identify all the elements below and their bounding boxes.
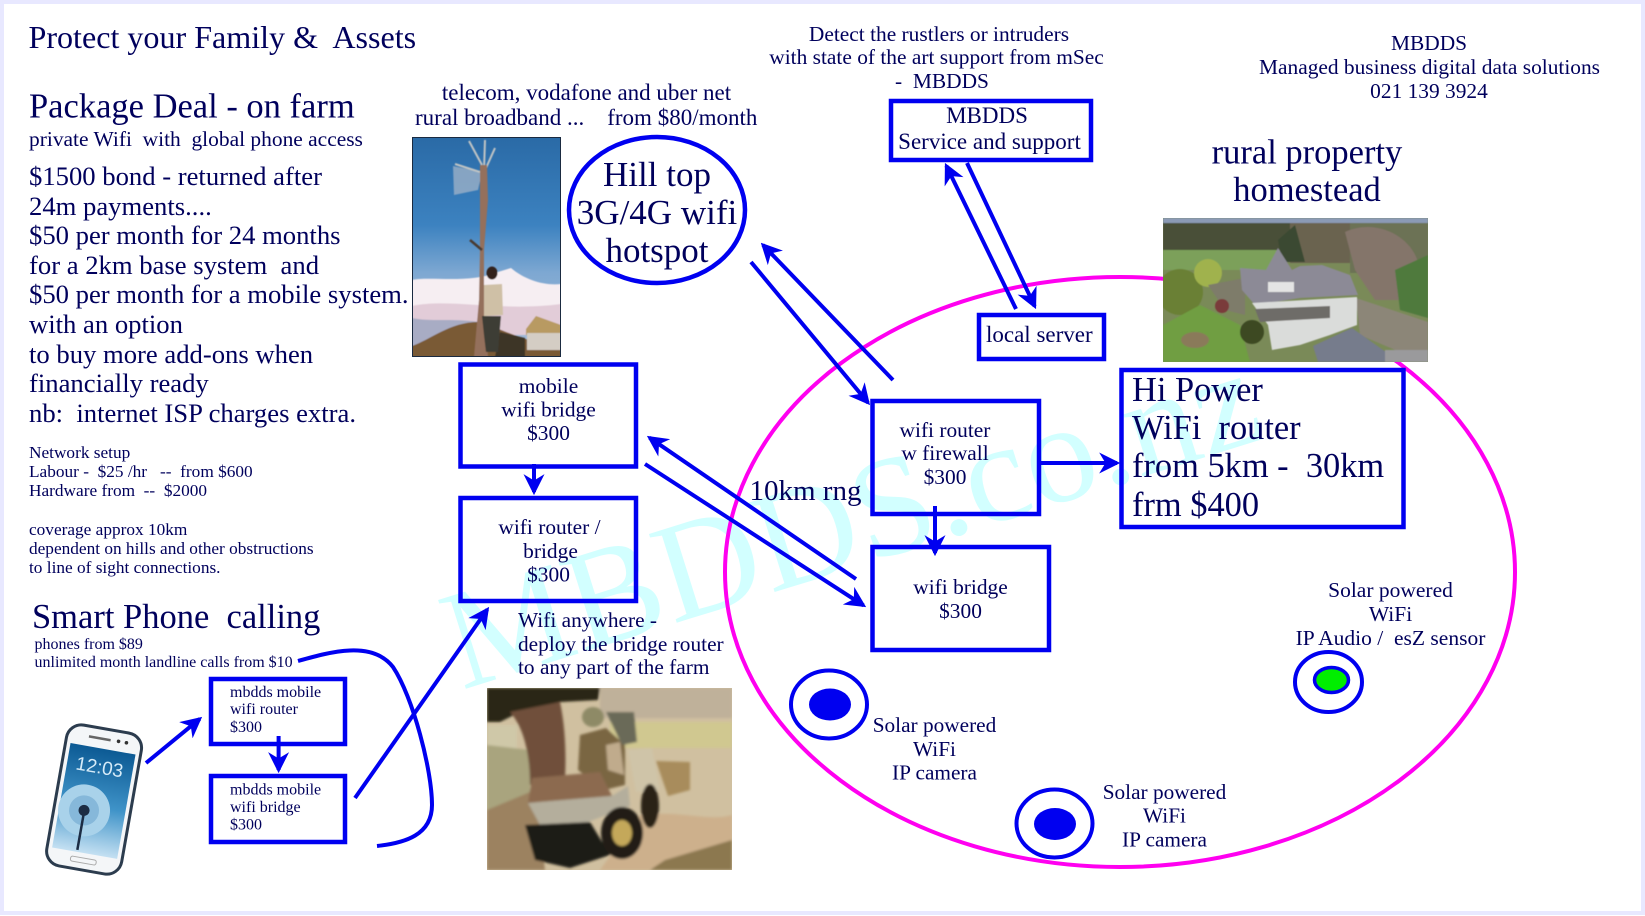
box: mobile wifi bridge: $300 [527,421,570,445]
text block: coverage: coverage approx 10km [29,520,188,539]
hotspot ellipse: hill top 3G/4G wifi: 3G/4G wifi [577,193,737,232]
box: MBDDS service and support: Service and support [898,129,1081,154]
text block: wifi anywhere: to any part of the farm [518,655,710,679]
text block: camera node 2 [1103,780,1227,852]
box: Hi Power WiFi router: from 5km - 30km [1132,447,1384,485]
box: mbdds mobile wifi bridge: mbdds mobile [230,782,321,798]
box: wifi router with firewall: w firewall [901,441,989,465]
box: mbdds mobile wifi bridge [211,776,345,842]
icon: smartphone: 12:03 [74,753,125,782]
box: Hi Power WiFi router: Hi Power [1132,371,1263,409]
text block: network setup: Labour - $25 /hr -- from $600 [29,462,253,481]
heading: smart phone calling: Smart Phone calling [32,598,320,636]
text block: package pricing: with an option [29,309,183,339]
subheading: private wifi: private Wifi with global phone access [29,127,363,151]
text block: network setup: Network setup [29,443,130,462]
arrow: mobile bridge to router bridge [532,464,536,492]
arrow: MBDDS support to local server [967,163,1035,306]
photo: hilltop antenna tower [412,137,561,357]
text block: camera node 1: IP camera [892,760,978,784]
box: local server: local server [986,322,1093,347]
hotspot ellipse: hill top 3G/4G wifi [569,137,745,283]
arrow: wifi bridge to mobile bridge [650,438,856,579]
text block: audio sensor node: Solar powered [1328,578,1453,602]
coverage ellipse: farm boundary [725,277,1515,867]
text block: phone pricing: unlimited month landline calls from $10 [34,654,293,671]
hotspot ellipse: hill top 3G/4G wifi: hotspot [605,231,709,270]
box: Hi Power WiFi router [1122,370,1404,527]
text block: package pricing: $50 per month for 24 months [29,220,341,250]
box: mobile wifi bridge: mobile [519,374,578,398]
text block: audio sensor node: WiFi [1369,602,1412,626]
title: Protect your Family & Assets [28,19,416,55]
text block: package pricing: to buy more add-ons when [29,339,313,369]
text block: package pricing: nb: internet ISP charges extra. [29,398,356,428]
box: wifi bridge [872,547,1049,650]
icon: smartphone [44,722,144,877]
photo: soldier on quad bike [487,688,732,870]
text block: coverage: to line of sight connections. [29,558,221,577]
text block: network setup [29,443,253,500]
arrow: hotspot back from router [763,245,893,380]
arrow: router to Hi Power [1041,461,1117,465]
text block: camera node 2: Solar powered [1103,780,1227,804]
text block: phone pricing: phones from $89 [34,636,143,653]
arrow: local server to MBDDS support [946,166,1016,309]
box: mbdds mobile wifi router: wifi router [230,701,299,718]
heading: rural property homestead: homestead [1233,171,1381,209]
text block: package pricing: financially ready [29,368,209,398]
box: Hi Power WiFi router: frm $400 [1132,486,1259,524]
arrow: mobile bridge to wifi bridge [645,464,864,605]
text block: camera node 1 [873,713,997,784]
box: wifi router with firewall [872,401,1039,514]
box: Hi Power WiFi router: WiFi router [1132,409,1301,447]
hotspot ellipse: hill top 3G/4G wifi: Hill top [603,155,711,194]
text block: MBDDS contact: 021 139 3924 [1370,79,1488,103]
box: wifi router / bridge: bridge [523,539,578,563]
text block: detect rustlers [769,22,1104,93]
text block: MBDDS contact: Managed business digital data solutions [1259,55,1600,79]
text block: camera node 1: Solar powered [873,713,997,737]
text block: network setup: Hardware from -- $2000 [29,481,207,500]
text block: package pricing: for a 2km base system and [29,250,319,280]
text block: phone pricing [34,636,293,671]
text block: camera node 1: WiFi [913,737,956,761]
text block: coverage [29,520,314,577]
box: mbdds mobile wifi router [211,679,345,744]
icon: solar wifi camera node 1 [791,670,867,738]
box: mobile wifi bridge [460,364,636,466]
text block: wifi anywhere [518,608,724,679]
curved link: landline calls to bridge [298,650,432,846]
icon: solar wifi audio sensor node [1295,652,1362,712]
box: mbdds mobile wifi router: mbdds mobile [230,684,321,701]
text block: telecom broadband: telecom, vodafone and uber net [442,80,732,105]
icon: solar wifi camera node 2 [1016,790,1092,858]
box: wifi router / bridge: wifi router / [498,515,601,539]
arrow: hotspot to wifi router [751,262,868,403]
text block: detect rustlers: - MBDDS [895,69,989,93]
label: 10km range: 10km rng [750,475,861,507]
box: wifi router / bridge [460,498,636,601]
text block: detect rustlers: with state of the art support from mSec [769,45,1104,69]
text block: camera node 2: IP camera [1122,828,1208,852]
text block: telecom broadband: rural broadband ... from $80/month [415,105,758,130]
arrow: mobile router to mobile bridge [277,736,281,770]
text block: telecom broadband [415,80,758,130]
box: wifi bridge: wifi bridge [913,575,1008,599]
text block: package pricing: $1500 bond - returned after [29,161,322,191]
text block: package pricing: 24m payments.... [29,191,212,221]
box: mbdds mobile wifi bridge: $300 [230,816,262,834]
text block: detect rustlers: Detect the rustlers or intruders [809,22,1069,46]
text block: coverage: dependent on hills and other obstructions [29,539,314,558]
text block: wifi anywhere: deploy the bridge router [518,632,724,656]
box: wifi router with firewall: $300 [924,465,966,489]
text block: MBDDS contact: MBDDS [1391,31,1467,55]
heading: package deal: Package Deal - on farm [29,88,355,126]
text block: package pricing [29,161,409,428]
box: mbdds mobile wifi bridge: wifi bridge [230,799,301,816]
box: local server [979,315,1104,359]
text block: camera node 2: WiFi [1143,804,1186,828]
box: wifi bridge: $300 [939,599,982,623]
text block: audio sensor node: IP Audio / esZ sensor [1296,626,1485,650]
box: wifi router with firewall: wifi router [900,418,990,442]
box: mobile wifi bridge: wifi bridge [501,398,596,422]
watermark: MBDDS.co.nz: MBDDS.co.nz [424,316,1277,720]
box: wifi router / bridge: $300 [527,562,570,586]
box: MBDDS service and support [891,101,1091,160]
text block: package pricing: $50 per month for a mobile system. [29,279,409,309]
heading: rural property homestead [1212,134,1403,209]
arrow: phone to mobile router [146,719,200,763]
box: MBDDS service and support: MBDDS [946,103,1028,128]
arrow: router to wifi bridge [933,506,937,553]
heading: rural property homestead: rural property [1212,134,1403,172]
photo: homestead [1163,218,1428,362]
arrow: mobile bridge to wifi router bridge [355,610,487,798]
text block: wifi anywhere: Wifi anywhere - [518,608,657,632]
box: mbdds mobile wifi router: $300 [230,719,262,736]
text block: audio sensor node [1296,578,1485,650]
text block: MBDDS contact [1259,31,1600,103]
